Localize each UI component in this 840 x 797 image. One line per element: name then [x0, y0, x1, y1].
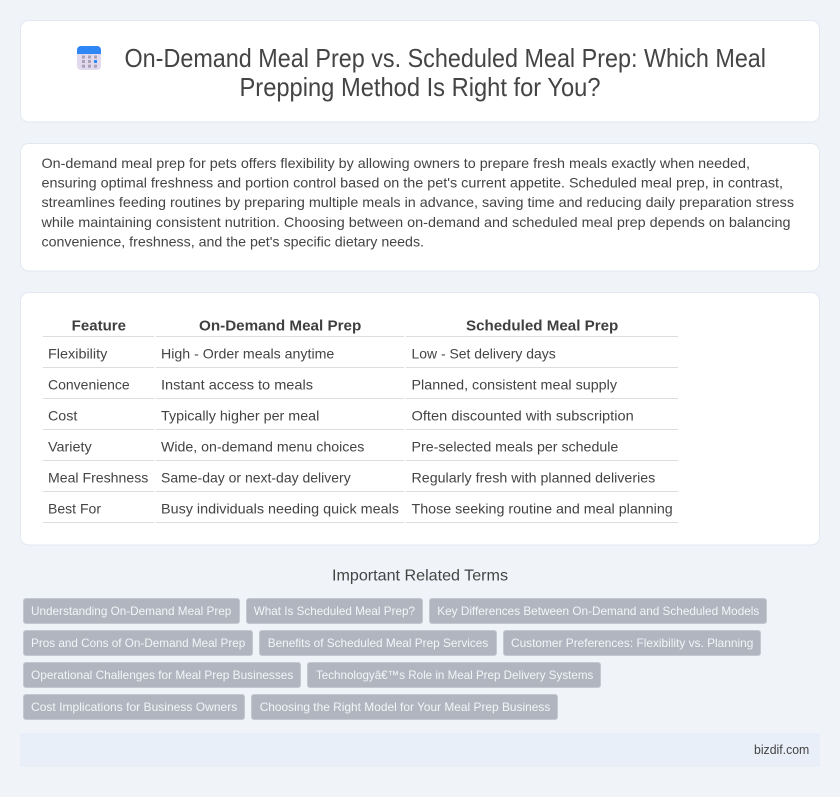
- panel: header: [20, 20, 820, 122]
- text block: description: [40, 155, 794, 249]
- table row: cost: [48, 407, 634, 423]
- tag: Customer Preferences: Flexibility vs. Planning: [511, 636, 753, 650]
- table header: Scheduled Meal Prep: [466, 318, 618, 335]
- table row: flexibility: [48, 345, 556, 361]
- table row: best for: Busy individuals needing quick meals: [161, 500, 399, 516]
- tag: Operational Challenges for Meal Prep Businesses: [31, 668, 293, 682]
- table row: variety: Pre-selected meals per schedule: [412, 438, 619, 454]
- panel: comparison table: [20, 292, 820, 545]
- text block: description: ensuring optimal freshness and portion control based on the pet's current appetite. Scheduled meal prep, in contrast,: [42, 175, 783, 191]
- table row: flexibility: Flexibility: [48, 345, 107, 361]
- footer: bizdif.com: [754, 742, 809, 757]
- tag: [308, 662, 600, 688]
- tag: [260, 630, 496, 656]
- table row: convenience: Convenience: [48, 376, 130, 392]
- text block: description: convenience, freshness, and the pet's specific dietary needs.: [42, 233, 424, 249]
- table row: flexibility: Low - Set delivery days: [412, 345, 556, 361]
- table row: best for: Those seeking routine and meal planning: [412, 500, 673, 516]
- tag: [24, 662, 300, 688]
- table row: meal freshness: [48, 469, 655, 485]
- footer: [20, 733, 820, 767]
- tag: [24, 694, 244, 720]
- table row: convenience: [48, 376, 617, 392]
- text block: description: On-demand meal prep for pets offers flexibility by allowing owners to prepare fresh meals exactly when needed,: [42, 155, 750, 171]
- table row: variety: [48, 438, 619, 454]
- table row: cost: Typically higher per meal: [161, 407, 319, 423]
- text block: description: while maintaining consistent nutrition. Choosing between on-demand and scheduled meal prep depends on balancing: [40, 214, 791, 230]
- title: Prepping Method Is Right for You?: [240, 72, 600, 102]
- table row: meal freshness: Meal Freshness: [48, 469, 148, 485]
- table header: [72, 318, 618, 335]
- table row: variety: Variety: [48, 438, 92, 454]
- tag: Key Differences Between On-Demand and Scheduled Models: [437, 604, 759, 618]
- text block: description: streamlines feeding routines by preparing multiple meals in advance, saving time and reducing daily preparation stress: [42, 194, 794, 210]
- table row: cost: Cost: [48, 407, 77, 423]
- icon: calendar: [77, 46, 101, 70]
- tag: [24, 630, 252, 656]
- table row: meal freshness: Regularly fresh with planned deliveries: [412, 469, 655, 485]
- tag: Understanding On-Demand Meal Prep: [31, 604, 232, 618]
- table row: flexibility: High - Order meals anytime: [161, 345, 335, 361]
- table row: best for: [48, 500, 673, 516]
- tag: [24, 598, 240, 624]
- tag: [246, 598, 422, 624]
- heading: important related terms: Important Related Terms: [332, 568, 508, 585]
- title: On-Demand Meal Prep vs. Scheduled Meal Prep: Which Meal: [124, 43, 766, 73]
- panel: description: [20, 144, 820, 271]
- tag: Cost Implications for Business Owners: [31, 700, 237, 714]
- tag: [430, 598, 766, 624]
- title: [124, 43, 766, 102]
- table row: variety: Wide, on-demand menu choices: [161, 438, 364, 454]
- tag: Benefits of Scheduled Meal Prep Services: [268, 636, 488, 650]
- tag: What Is Scheduled Meal Prep?: [254, 604, 415, 618]
- tag: Pros and Cons of On-Demand Meal Prep: [31, 636, 246, 650]
- table row: best for: Best For: [48, 500, 101, 516]
- tag: Choosing the Right Model for Your Meal Prep Business: [260, 700, 550, 714]
- tags: related terms: [24, 598, 766, 720]
- tag: Technologyâ€™s Role in Meal Prep Delivery Systems: [316, 668, 593, 682]
- table header: Feature: [72, 318, 126, 335]
- table row: meal freshness: Same-day or next-day delivery: [161, 469, 351, 485]
- table row: convenience: Planned, consistent meal supply: [412, 376, 617, 392]
- tag: [252, 694, 558, 720]
- table header: On-Demand Meal Prep: [199, 318, 361, 335]
- table row: convenience: Instant access to meals: [161, 376, 313, 392]
- tag: [504, 630, 760, 656]
- table row: cost: Often discounted with subscription: [412, 407, 634, 423]
